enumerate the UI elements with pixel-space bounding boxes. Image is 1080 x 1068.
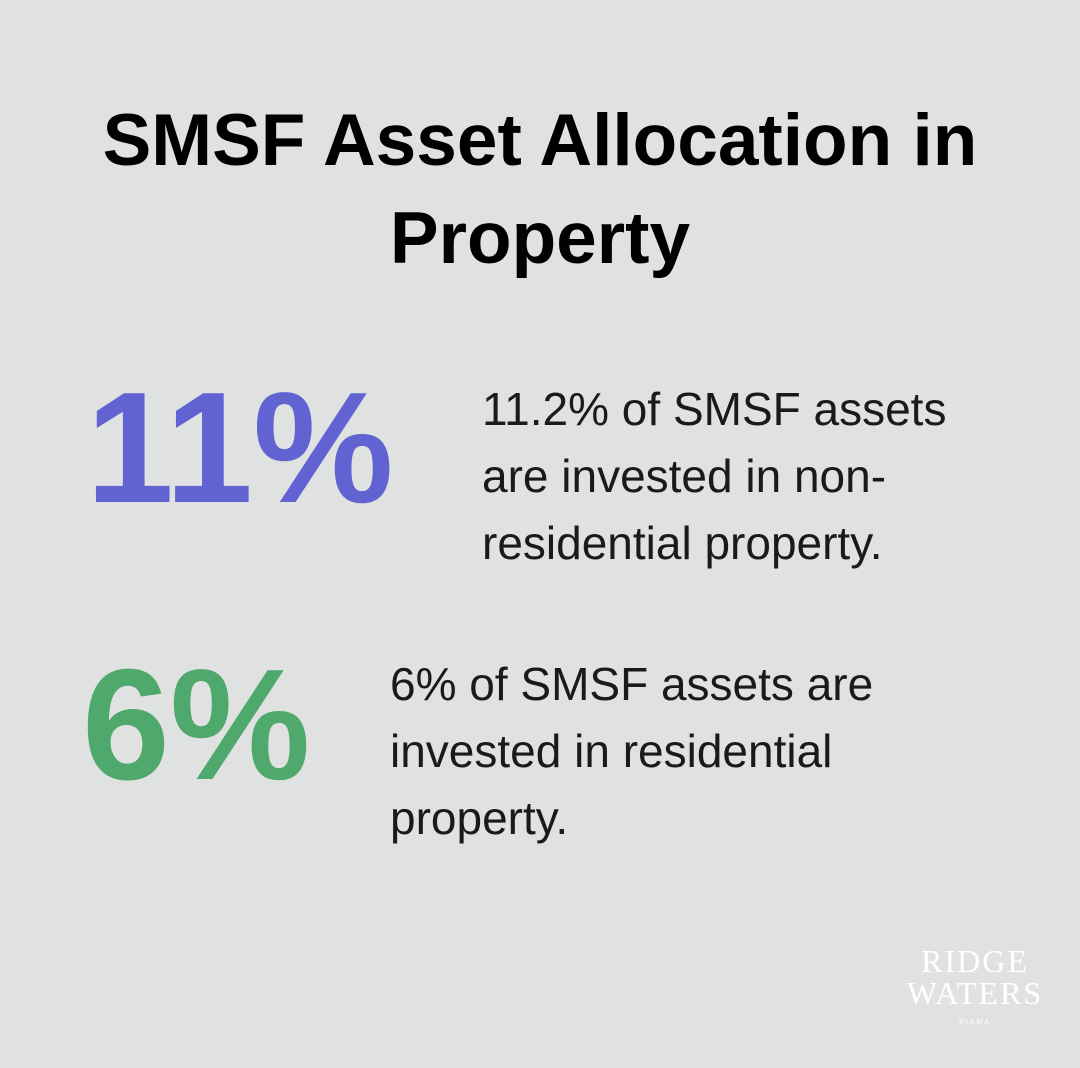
logo: KIAMA [959, 1019, 991, 1026]
logo [906, 943, 1043, 1026]
text: non-residential: are invested in non- [482, 450, 886, 502]
stat: 6%: 6% [82, 637, 310, 813]
text: non-residential: 11.2% of SMSF assets [482, 383, 946, 435]
logo: WATERS [907, 975, 1043, 1011]
logo: RIDGE [921, 943, 1029, 979]
text: residential [390, 658, 873, 844]
text: residential: 6% of SMSF assets are [390, 658, 873, 710]
title: SMSF Asset Allocation in [103, 100, 977, 181]
text: residential: invested in residential [390, 725, 832, 777]
text: non-residential [482, 383, 946, 569]
title [103, 100, 977, 279]
title: Property [390, 198, 690, 279]
text: non-residential: residential property. [482, 517, 883, 569]
stat: 11%: 11% [86, 360, 394, 536]
text: residential: property. [390, 792, 568, 844]
